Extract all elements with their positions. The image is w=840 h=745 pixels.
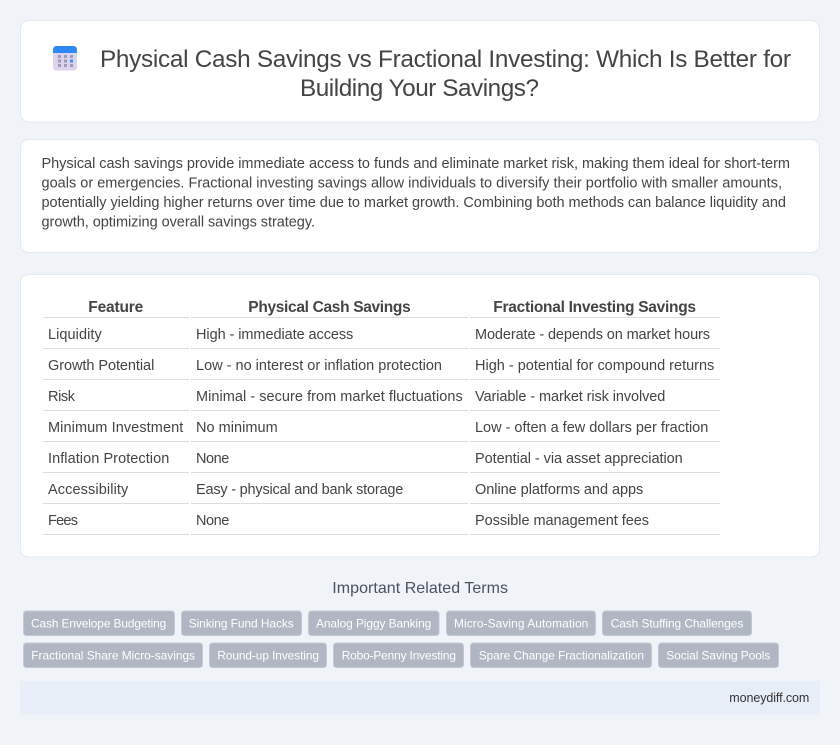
tag: Cash Stuffing Challenges: Cash Stuffing Challenges — [611, 616, 743, 630]
text block: summary — [42, 156, 790, 230]
table row: growth potential: High - potential for compound returns — [475, 358, 714, 374]
table row: liquidity: Moderate - depends on market hours — [475, 327, 710, 343]
tag: Robo-Penny Investing: Robo-Penny Investing — [342, 648, 456, 662]
tag: Cash Stuffing Challenges — [602, 611, 752, 636]
tag: Micro-Saving Automation — [446, 611, 596, 636]
table row: growth potential: Low - no interest or inflation protection — [196, 358, 442, 374]
text block: summary: goals or emergencies. Fractional investing savings allow individuals to diversify their portfolio with smaller amounts, — [42, 176, 782, 192]
table row: fees — [43, 513, 720, 535]
table row: accessibility: Easy - physical and bank storage — [196, 482, 403, 498]
table row: accessibility: Online platforms and apps — [475, 482, 643, 498]
table row: accessibility: Accessibility — [48, 482, 129, 498]
table row: risk: Minimal - secure from market fluctuations — [196, 389, 463, 405]
table row: inflation protection: Potential - via asset appreciation — [475, 451, 683, 467]
table row: fees: Fees — [48, 513, 78, 529]
table row: liquidity — [43, 327, 720, 349]
table header row — [43, 299, 720, 318]
tag: Micro-Saving Automation: Micro-Saving Automation — [454, 616, 588, 630]
tag: Spare Change Fractionalization — [470, 643, 652, 668]
heading: related terms: Important Related Terms — [332, 580, 508, 597]
tag: Round-up Investing: Round-up Investing — [217, 648, 319, 662]
tag: Robo-Penny Investing — [334, 643, 464, 668]
tag: Sinking Fund Hacks — [182, 611, 302, 636]
tag: Round-up Investing — [210, 643, 326, 668]
table header row: Feature — [88, 299, 144, 316]
table row: growth potential: Growth Potential — [48, 358, 154, 374]
footer brand text: moneydiff.com — [729, 691, 809, 705]
table row: risk: Risk — [48, 389, 76, 405]
table row: minimum investment: No minimum — [196, 420, 278, 436]
table row: accessibility — [43, 482, 720, 504]
panel: comparison table — [20, 274, 820, 557]
table row: minimum investment: Low - often a few dollars per fraction — [475, 420, 708, 436]
table header row: Fractional Investing Savings — [493, 299, 696, 316]
table row: fees: None — [196, 513, 229, 529]
text block: summary: growth, optimizing overall savings strategy. — [42, 214, 315, 230]
panel: summary paragraph — [20, 140, 820, 252]
table header row: Physical Cash Savings — [248, 299, 411, 316]
tag: Social Saving Pools: Social Saving Pools — [666, 648, 770, 662]
icon: calendar — [53, 46, 77, 70]
table row: minimum investment: Minimum Investment — [48, 420, 183, 436]
tag: Sinking Fund Hacks: Sinking Fund Hacks — [189, 616, 294, 630]
panel: related term tags — [24, 611, 778, 668]
table row: inflation protection — [43, 451, 720, 473]
text block: summary: potentially yielding higher returns over time due to market growth. Combining both methods can balance liquidity and — [42, 195, 786, 211]
tag: Cash Envelope Budgeting: Cash Envelope Budgeting — [31, 616, 166, 630]
table row: inflation protection: None — [196, 451, 229, 467]
tag: Fractional Share Micro-savings: Fractional Share Micro-savings — [31, 648, 195, 662]
title: Building Your Savings? — [300, 75, 539, 102]
table row: risk: Variable - market risk involved — [475, 389, 665, 405]
title: Physical Cash Savings vs Fractional Investing: Which Is Better for — [100, 46, 791, 73]
title — [100, 46, 791, 102]
table row: liquidity: High - immediate access — [196, 327, 353, 343]
tag: Analog Piggy Banking — [308, 611, 439, 636]
footer bar — [20, 681, 820, 714]
tag: Social Saving Pools — [658, 643, 778, 668]
tag: Analog Piggy Banking: Analog Piggy Banking — [316, 616, 431, 630]
tag: Spare Change Fractionalization: Spare Change Fractionalization — [479, 648, 644, 662]
table row: risk — [43, 389, 720, 411]
table row: growth potential — [43, 358, 720, 380]
table row: inflation protection: Inflation Protection — [48, 451, 169, 467]
tag: Cash Envelope Budgeting — [24, 611, 174, 636]
table row: fees: Possible management fees — [475, 513, 649, 529]
panel: header — [20, 20, 820, 122]
table row: minimum investment — [43, 420, 720, 442]
tag: Fractional Share Micro-savings — [24, 643, 202, 668]
text block: summary: Physical cash savings provide immediate access to funds and eliminate market risk, making them ideal for short-term — [42, 156, 790, 172]
table row: liquidity: Liquidity — [48, 327, 102, 343]
